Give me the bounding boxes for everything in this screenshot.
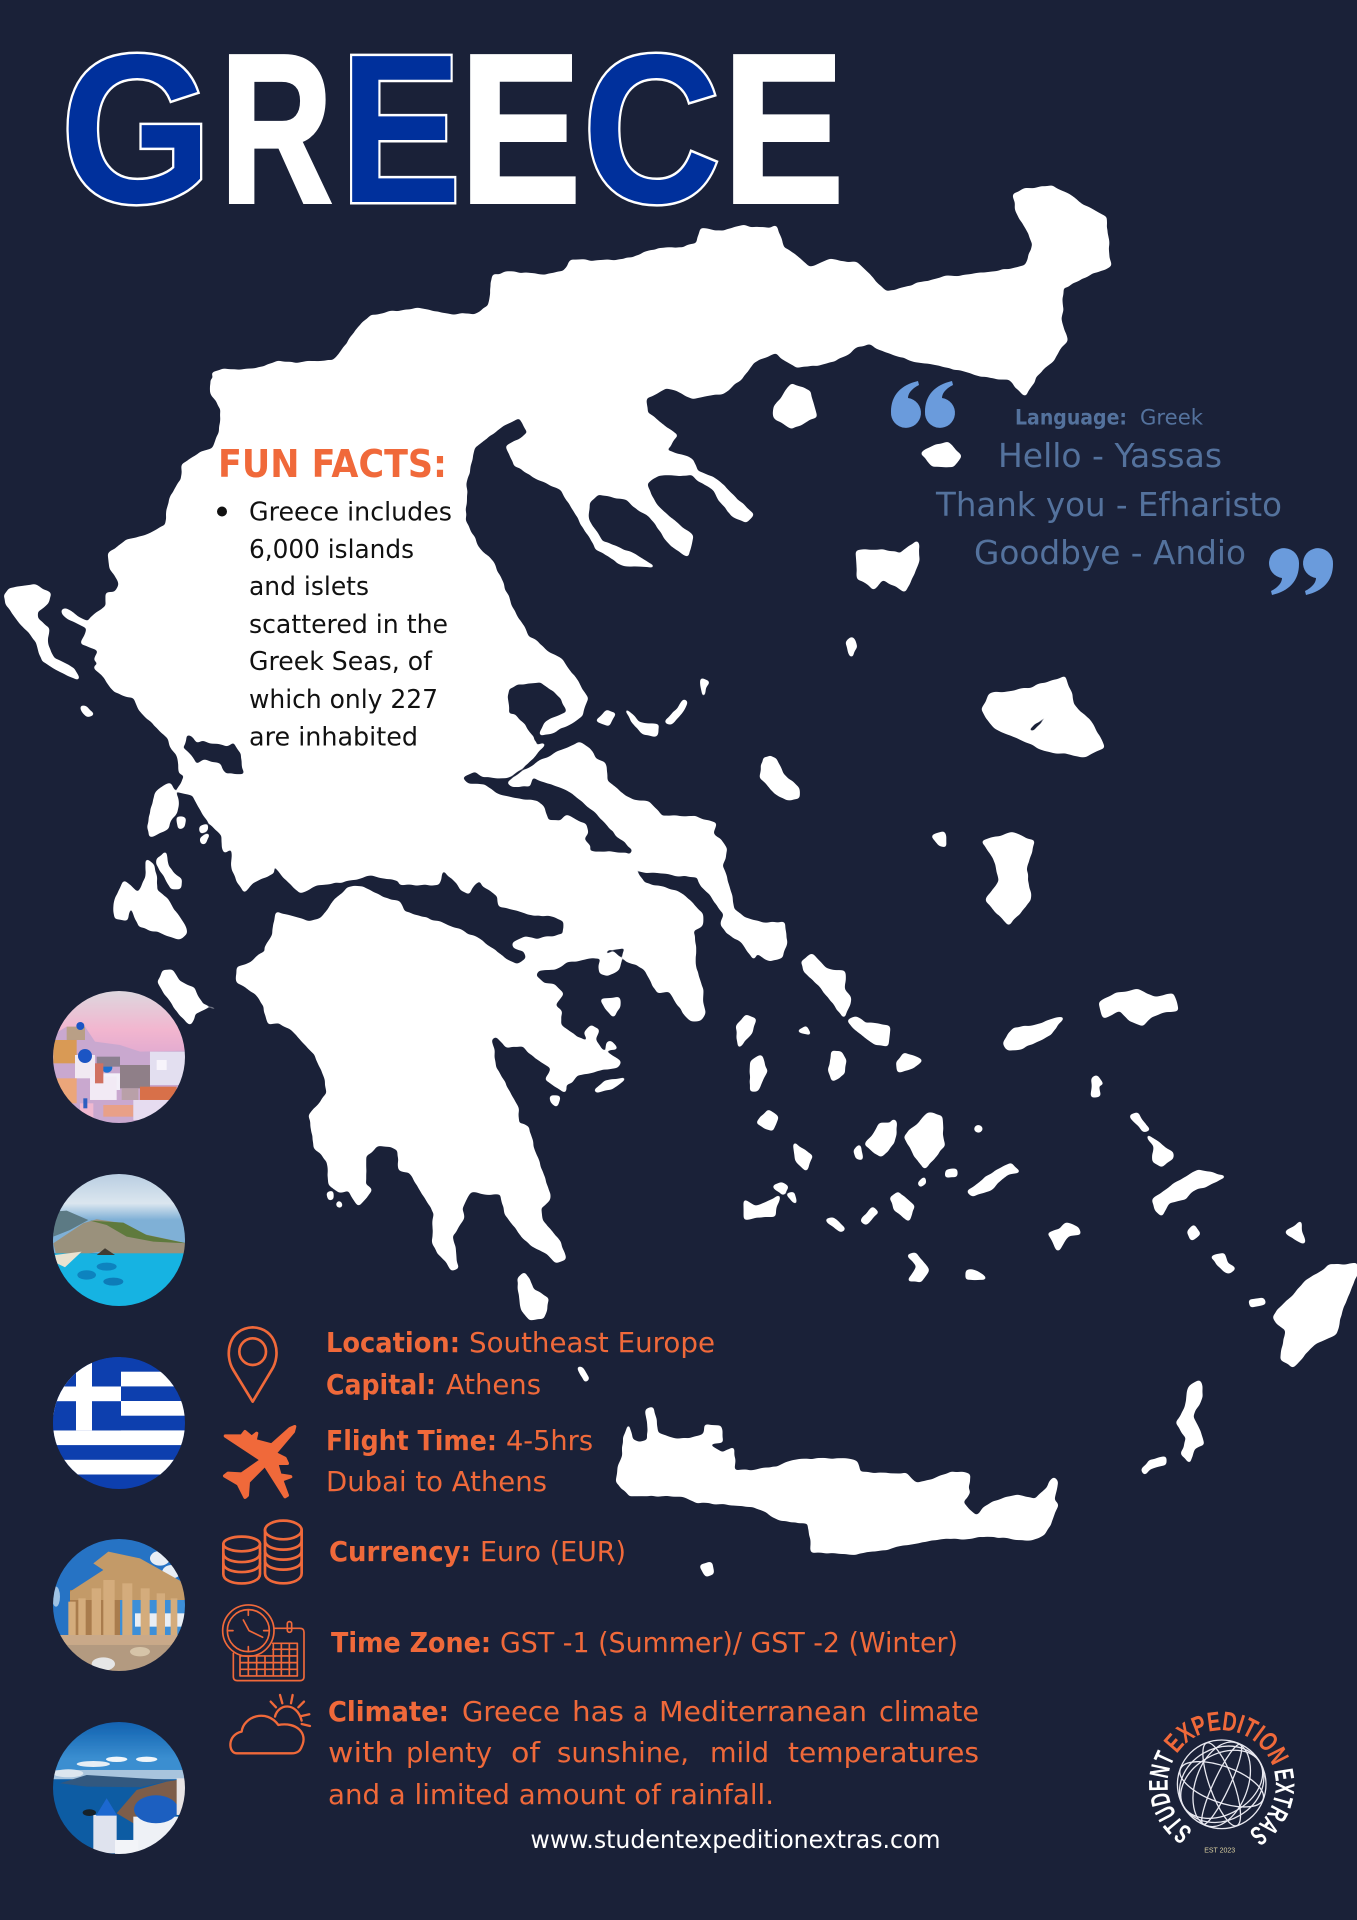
- time zone: GST -1 (Summer)/ GST -2 (Winter): [500, 1626, 958, 1659]
- Crete and southern islands: [616, 1381, 1203, 1576]
- climate: with: [328, 1736, 394, 1769]
- logo: Student Expedition Extras: STUDENT: [1149, 1750, 1191, 1843]
- logo: Student Expedition Extras: [1149, 1712, 1294, 1854]
- logo: Student Expedition Extras: EXPEDITION: [1163, 1712, 1289, 1766]
- flight time: Flight Time:: [326, 1424, 497, 1457]
- icon: clock and calendar: [223, 1605, 304, 1681]
- photo: Navagio beach: [53, 1174, 185, 1306]
- climate: sunshine,: [557, 1736, 689, 1769]
- small islet near Crete: [578, 1368, 588, 1381]
- time zone: Time Zone:: [331, 1626, 491, 1659]
- photo: Parthenon: [50, 1537, 190, 1673]
- photo: Greek flag: [52, 1357, 186, 1489]
- title: [61, 10, 844, 248]
- fun facts text: scattered in the: [249, 610, 448, 640]
- climate: has: [572, 1695, 624, 1728]
- title: E: [460, 10, 581, 247]
- climate: and a limited amount of rainfall.: [328, 1778, 774, 1811]
- language phrases: [935, 406, 1282, 572]
- title: E: [723, 10, 844, 247]
- Cyclades and Dodecanese islands: [737, 954, 1357, 1367]
- central Greece and Euboea: [400, 700, 799, 1020]
- currency: [329, 1535, 626, 1568]
- climate: plenty: [406, 1736, 492, 1769]
- title: G: [61, 11, 212, 248]
- currency: Euro (EUR): [480, 1535, 626, 1568]
- location and capital: Capital:: [326, 1368, 436, 1401]
- map of Greece: [4, 187, 1357, 1576]
- language phrases: Thank you - Efharisto: [935, 485, 1282, 524]
- fun facts text: 6,000 islands: [249, 535, 414, 565]
- climate: mild: [710, 1736, 769, 1769]
- climate: a: [633, 1695, 648, 1728]
- photo: Santorini village at sunset: [50, 988, 190, 1125]
- logo: Student Expedition Extras: EXTRAS: [1250, 1768, 1294, 1845]
- fun facts text: Greek Seas, of: [249, 647, 433, 677]
- climate: Mediterranean: [659, 1695, 867, 1728]
- icon: closing quote: [1269, 548, 1333, 595]
- icon: airplane: [225, 1427, 295, 1497]
- climate: Greece: [462, 1695, 560, 1728]
- flight time: Dubai to Athens: [326, 1465, 547, 1498]
- language phrases: Language:: [1015, 406, 1127, 430]
- Peloponnese: [158, 887, 625, 1318]
- fun facts text: Greece includes: [249, 498, 452, 528]
- western mainland and Ionian islands: [4, 380, 500, 939]
- climate: of: [511, 1736, 541, 1769]
- title: E: [340, 10, 461, 247]
- north Aegean islands: [701, 384, 1103, 924]
- location and capital: Location:: [326, 1326, 460, 1359]
- title: C: [583, 10, 721, 247]
- photo: Oia blue dome: [50, 1720, 190, 1855]
- climate: temperatures: [788, 1736, 979, 1769]
- currency: Currency:: [329, 1535, 471, 1568]
- fun facts text: which only 227: [249, 685, 438, 715]
- logo: Student Expedition Extras: EST 2023: [1204, 1847, 1235, 1854]
- fun facts text: [217, 498, 452, 752]
- location and capital: [326, 1326, 715, 1401]
- icon: sun behind cloud: [230, 1695, 310, 1753]
- location and capital: Athens: [446, 1368, 541, 1401]
- flight time: 4-5hrs: [506, 1424, 593, 1457]
- language phrases: Hello - Yassas: [998, 436, 1222, 475]
- fun facts text: are inhabited: [249, 722, 418, 752]
- title: R: [220, 12, 333, 248]
- icon: location pin: [229, 1327, 277, 1402]
- climate: [328, 1695, 979, 1811]
- website url: www.studentexpeditionextras.com: [530, 1825, 940, 1854]
- icon: coin stacks: [223, 1521, 302, 1583]
- flight time: [326, 1424, 593, 1498]
- climate: climate: [879, 1695, 979, 1728]
- climate: Climate:: [328, 1695, 449, 1728]
- icon: opening quote: [891, 381, 955, 428]
- language phrases: Goodbye - Andio: [974, 533, 1246, 572]
- location and capital: Southeast Europe: [469, 1326, 715, 1359]
- northern mainland: [212, 187, 1109, 765]
- fun facts text: and islets: [249, 572, 369, 602]
- language phrases: Greek: [1140, 406, 1204, 430]
- fun facts heading: FUN FACTS:: [218, 442, 447, 486]
